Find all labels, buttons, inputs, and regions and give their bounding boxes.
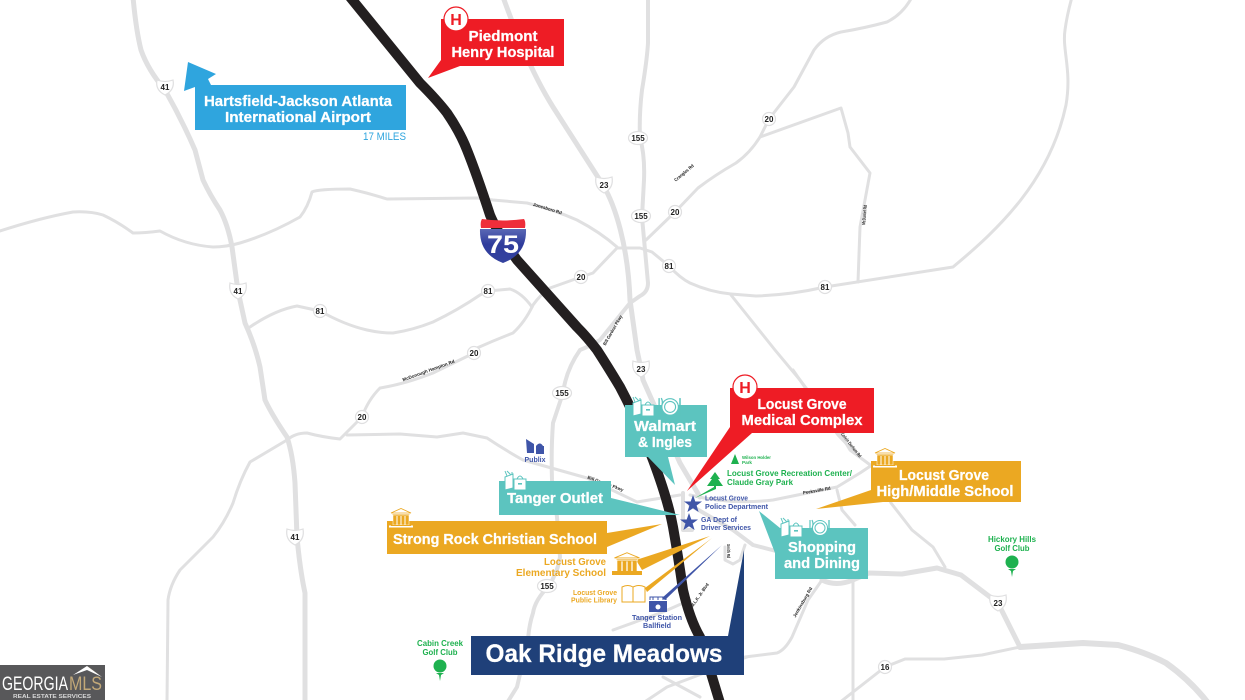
road name labels: Smith Rd <box>726 544 731 558</box>
road: local connector <box>837 490 855 525</box>
I-75 interstate shield <box>480 219 526 263</box>
highway markers: 20 <box>470 349 479 358</box>
callout: Tanger Outlet <box>499 471 680 515</box>
highway markers: 20 <box>765 115 774 124</box>
road name labels: Bill Gardner Pkwy <box>602 314 624 346</box>
highway markers: 20 <box>577 273 586 282</box>
Locust Grove Recreation Center: Claude Gray Park <box>727 477 793 487</box>
Locust Grove Recreation Center <box>695 468 853 498</box>
callout: Locust Grove Medical Complex <box>687 375 874 491</box>
highway markers: 41 <box>161 83 170 92</box>
highway markers <box>157 80 1006 674</box>
highway markers: 155 <box>540 582 554 591</box>
road name labels: Jonesboro Rd <box>532 202 563 215</box>
road: Peeksville Rd <box>690 465 872 502</box>
icon: shopping and dining <box>633 397 680 417</box>
road name labels: McDaniel Rd <box>861 205 868 225</box>
icon: hospital H: H <box>739 380 751 397</box>
road name labels <box>402 163 868 618</box>
Locust Grove Police Department: Police Department <box>705 502 768 511</box>
highway markers: 155 <box>634 212 648 221</box>
highway markers: 20 <box>671 208 680 217</box>
callout: Locust Grove High/Middle School <box>816 448 1021 509</box>
callout: Piedmont Henry Hospital <box>428 7 564 78</box>
highway markers: 23 <box>600 181 609 190</box>
callout: Oak Ridge Meadows: Oak Ridge Meadows <box>486 640 722 668</box>
GA Dept of Driver Services: Driver Services <box>701 523 751 532</box>
callout: Locust Grove Medical Complex: Locust Grove <box>758 397 846 413</box>
logo: Georgia MLS: MLS <box>69 674 102 695</box>
road: McDaniel Rd <box>760 108 870 282</box>
icon: hospital H <box>733 375 757 399</box>
GA Dept of Driver Services: GA Dept of <box>701 515 737 524</box>
callout: Strong Rock Christian School <box>387 508 662 554</box>
highway markers: 81 <box>316 307 325 316</box>
road: GA 20 west <box>167 248 617 700</box>
highway markers: 155 <box>555 389 569 398</box>
icon: school <box>873 448 897 466</box>
highway markers: 81 <box>821 283 830 292</box>
Locust Grove Elementary School: Elementary School <box>516 567 606 579</box>
Locust Grove Public Library: Public Library <box>571 596 618 604</box>
highway markers: 81 <box>484 287 493 296</box>
road name labels: McDonough Hampton Rd <box>402 359 455 382</box>
road: GA 16 <box>839 647 1020 700</box>
road: Bill Gardner Pkwy <box>347 433 680 502</box>
callout: Oak Ridge Meadows <box>471 550 744 675</box>
road: Colvin Durham Rd <box>793 370 857 455</box>
road: GA 16 east <box>1020 643 1208 700</box>
callout: Piedmont Henry Hospital: Piedmont <box>468 29 538 45</box>
Cabin Creek Golf Club: Cabin Creek <box>417 638 463 648</box>
Hickory Hills Golf Club: Golf Club <box>994 543 1030 553</box>
I-75 interstate shield: 75 <box>487 231 519 259</box>
road: GA 155 <box>507 0 648 700</box>
Locust Grove Police Department <box>684 494 768 512</box>
icon: star <box>684 495 702 512</box>
callout: Strong Rock Christian School: Strong Rock Christian School <box>393 532 597 548</box>
road name labels: Colvin Durham Rd <box>840 432 862 459</box>
logo: Georgia MLS: REAL ESTATE SERVICES <box>13 694 92 700</box>
Wilson Holder Park <box>731 454 771 465</box>
Locust Grove Public Library: Locust Grove <box>573 588 617 597</box>
Locust Grove Recreation Center: Locust Grove Recreation Center/ <box>727 468 853 478</box>
highway markers: 16 <box>881 663 890 672</box>
road: south vertical <box>852 560 854 700</box>
highway markers: 41 <box>291 533 300 542</box>
road: US 23 through town <box>690 505 776 551</box>
Locust Grove Elementary School: Locust Grove <box>544 556 606 568</box>
callout: Shopping and Dining: and Dining <box>784 556 860 572</box>
road: US 41 <box>133 0 305 700</box>
callout: Hartsfield-Jackson Airport: International Airport <box>225 110 371 126</box>
callout: Hartsfield-Jackson Airport: Hartsfield-Jackson Atlanta <box>204 94 393 110</box>
highway markers: 23 <box>637 365 646 374</box>
icon: tree <box>707 472 723 489</box>
highway markers: 23 <box>994 599 1003 608</box>
icon: school <box>389 508 413 526</box>
Locust Grove Elementary School <box>516 536 710 579</box>
callout: Walmart and Ingles <box>625 397 707 485</box>
road name labels: Jenkinsburg Rd <box>792 586 813 618</box>
callout: Tanger Outlet: Tanger Outlet <box>507 491 603 507</box>
callout: Shopping and Dining: Shopping <box>788 540 856 556</box>
Wilson Holder Park: Wilson Holder <box>742 455 771 460</box>
Hickory Hills Golf Club <box>988 534 1036 577</box>
road name labels: Peeksville Rd <box>803 486 831 495</box>
callout: Walmart and Ingles: & Ingles <box>638 435 692 451</box>
logo: Georgia MLS: GEORGIA <box>2 674 68 695</box>
road name labels: Bill Gardner Pkwy <box>587 475 625 493</box>
road: GA 81 west <box>250 289 532 333</box>
Cabin Creek Golf Club: Golf Club <box>422 647 458 657</box>
icon: shopping and dining <box>781 518 829 537</box>
Locust Grove Police Department: Locust Grove <box>705 494 748 502</box>
icon: hospital H: H <box>450 12 462 29</box>
GA Dept of Driver Services <box>680 513 751 532</box>
callout: Walmart and Ingles: Walmart <box>634 419 696 435</box>
callout: Piedmont Henry Hospital: Henry Hospital <box>452 45 554 61</box>
Publix marker: Publix <box>524 455 546 464</box>
callout: Shopping and Dining <box>759 511 868 579</box>
Tanger Station Ballfield <box>632 545 722 630</box>
callout: Locust Grove Medical Complex: Medical Complex <box>742 413 862 429</box>
Hickory Hills Golf Club: Hickory Hills <box>988 534 1036 544</box>
Wilson Holder Park: Park <box>742 460 753 465</box>
icon: star <box>680 513 698 530</box>
logo: Georgia MLS <box>0 665 105 700</box>
callout: Locust Grove High/Middle School: High/Middle School <box>876 484 1014 500</box>
callout: Locust Grove High/Middle School: Locust Grove <box>899 468 989 484</box>
road: Jenkinsburg Rd <box>745 580 822 657</box>
icon: school <box>612 553 642 575</box>
icon: shopping bags <box>505 471 526 490</box>
highway markers: 41 <box>234 287 243 296</box>
Tanger Station Ballfield: Ballfield <box>643 621 671 630</box>
icon: ballfield <box>649 597 667 612</box>
Tanger Station Ballfield: Tanger Station <box>632 613 682 622</box>
Cabin Creek Golf Club <box>417 638 463 681</box>
icon: book <box>622 586 645 602</box>
interstate I-75 route <box>350 0 720 700</box>
road: centre junction block <box>683 493 692 530</box>
road: Jonesboro Rd <box>0 189 617 247</box>
road: US 23 <box>503 0 700 497</box>
road: east connector <box>731 295 945 567</box>
road: south local <box>613 600 747 700</box>
road: GA 81 east <box>617 0 1072 296</box>
callout: Hartsfield-Jackson Airport <box>184 62 406 143</box>
road name labels: Crangles Rd <box>673 163 695 182</box>
road name labels: M.L.K. Jr. Blvd <box>690 582 710 608</box>
highway markers: 81 <box>665 262 674 271</box>
callout: Hartsfield-Jackson Airport: 17 MILES <box>363 131 406 143</box>
road: US 23 south segment <box>822 568 1020 647</box>
highway markers: 20 <box>358 413 367 422</box>
Publix marker <box>524 439 546 464</box>
Locust Grove Public Library <box>571 538 712 604</box>
highway markers: 155 <box>631 134 645 143</box>
road: GA 20 east <box>646 0 912 240</box>
road: local loop <box>725 545 745 564</box>
